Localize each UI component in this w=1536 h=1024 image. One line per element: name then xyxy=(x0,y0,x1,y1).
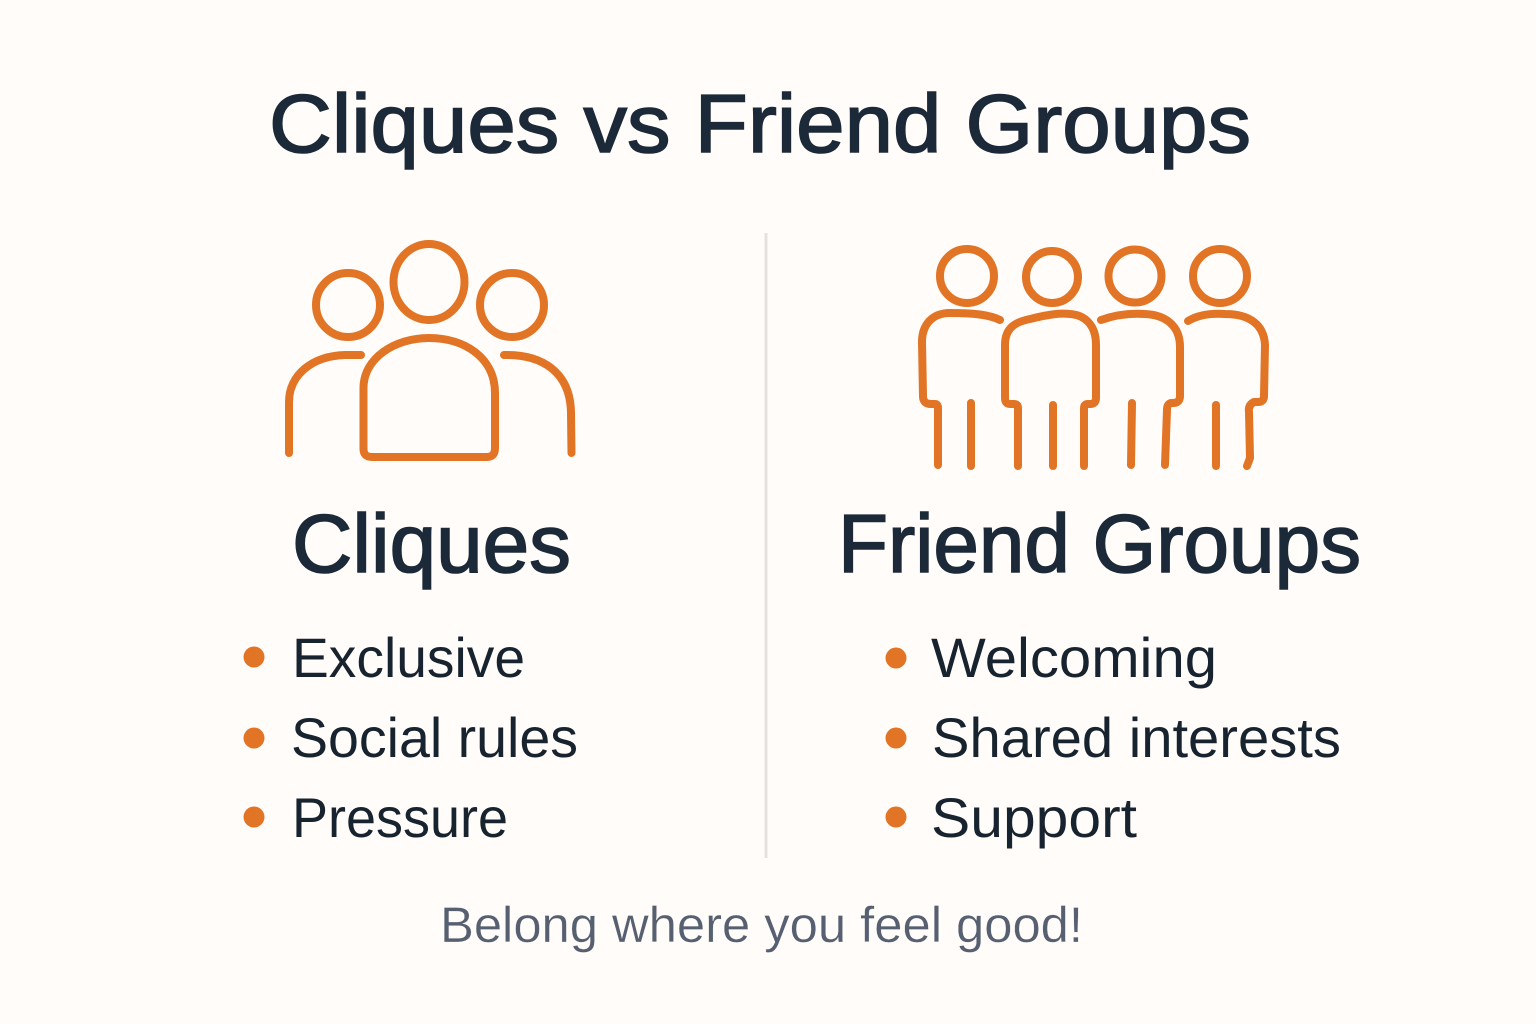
list: friend group traits xyxy=(886,626,1341,849)
heading: friend groups: Friend Groups xyxy=(838,497,1361,590)
list: cliques traits: Exclusive xyxy=(292,626,525,689)
footer tagline: Belong where you feel good! xyxy=(440,897,1083,953)
list: friend group traits: Support xyxy=(931,786,1137,849)
divider xyxy=(764,233,768,858)
list: cliques traits: Pressure xyxy=(292,786,508,849)
list: friend group traits: Shared interests xyxy=(932,706,1341,769)
icon: four people in a row xyxy=(922,249,1265,466)
icon: three people clique xyxy=(289,244,572,457)
list: cliques traits xyxy=(244,626,578,849)
panel: friend groups xyxy=(838,249,1361,849)
title: Cliques vs Friend Groups xyxy=(269,77,1251,170)
list: friend group traits: Welcoming xyxy=(931,626,1217,689)
heading: cliques: Cliques xyxy=(292,497,571,590)
list: cliques traits: Social rules xyxy=(291,706,578,769)
panel: cliques xyxy=(244,244,578,849)
